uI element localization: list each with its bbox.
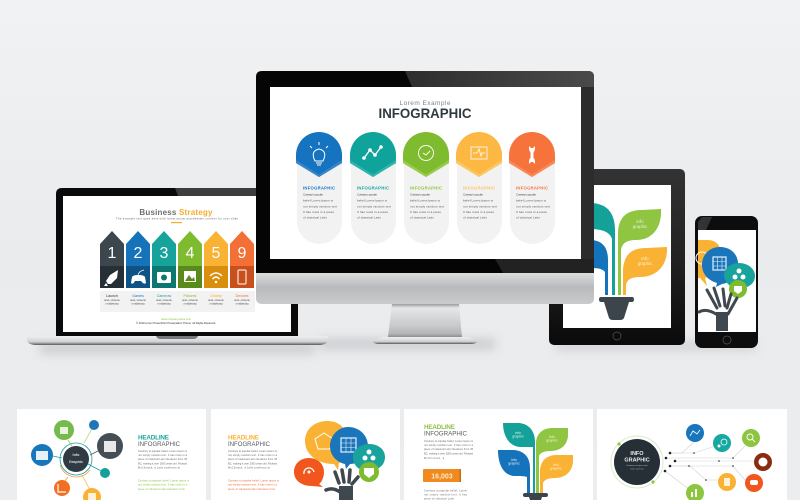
green bubble [729, 280, 747, 298]
network nodes [686, 424, 772, 500]
card 4 text: It has roots in a piece [463, 210, 494, 214]
arrow column 2 [126, 231, 150, 288]
thumbnail 1 body text: piece of classical Latin literature from 45 [138, 458, 188, 461]
arrow column 1 [100, 231, 124, 288]
card 4 pill [457, 160, 502, 244]
card 4 label: INFOGRAPHIC [463, 186, 495, 190]
card 3 text: belief Lorem Ipsum is [410, 198, 440, 202]
card 5 pill [510, 160, 555, 244]
laptop device [27, 188, 328, 345]
thumbnail 2 body text [228, 450, 278, 470]
thumbnail 2 body text: Contrary to popular belief, Lorem Ipsum is [228, 450, 278, 453]
network hub: lorem text here [630, 468, 645, 470]
laptop footer: www.companyname.com [161, 318, 191, 321]
card 2 text: not simply random text [357, 204, 391, 208]
teal leaf: graphic [512, 434, 524, 438]
card 5 text: belief Lorem Ipsum is [516, 198, 546, 202]
card 2 text: of classical Latin [357, 216, 381, 220]
card 5 text: of classical Latin [516, 216, 540, 220]
card 3 pill [404, 160, 449, 244]
thumbnail 1 body text: Contrary to popular belief, Lorem Ipsum is [138, 450, 188, 453]
thumbnail 3 body text [424, 440, 474, 460]
laptop accent dash [171, 222, 182, 223]
thumbnail 1 headline [138, 434, 180, 448]
monitor bezel [256, 71, 594, 273]
card 3 text: It has roots in a piece [410, 210, 441, 214]
card 3 text [410, 192, 444, 220]
card 1 label: INFOGRAPHIC [303, 186, 335, 190]
card 4 [456, 132, 502, 244]
arrow column 5: 5 [212, 245, 221, 262]
phone screen [698, 230, 756, 332]
column captions panel: Devices [236, 294, 249, 298]
thumbnail 2 headline: INFOGRAPHIC [228, 441, 270, 448]
card 2 pill [351, 160, 396, 244]
column captions panel: or adipiscing [210, 302, 223, 306]
icon: light bulb [310, 142, 328, 165]
column captions panel: amet, consecte [156, 299, 173, 302]
thumbnail 2 headline: HEADLINE [228, 434, 259, 442]
blue leaf: graphic [508, 462, 520, 466]
arrow column 6: 9 [238, 245, 247, 262]
orange leaf: info [553, 463, 559, 467]
icon: monitor pulse [471, 147, 487, 159]
thumbnail 2 body text: not simply random text. It has roots in a [228, 454, 278, 457]
phone home button [723, 336, 731, 344]
tablet screen [563, 185, 671, 328]
thumbnail 1 headline: INFOGRAPHIC [138, 441, 180, 448]
column captions panel: amet, consecte [104, 299, 121, 302]
column captions panel: Cameras [157, 294, 171, 298]
blue bubble [330, 427, 368, 469]
column captions panel: or adipiscing [158, 302, 171, 306]
pot [599, 297, 634, 320]
tablet plant infographic: graphic [633, 224, 648, 229]
thumbnail 3 headline: INFOGRAPHIC [424, 430, 467, 438]
green leaf [536, 428, 568, 495]
leaf labels: info [636, 219, 644, 224]
card 4 text: of classical Latin [463, 216, 487, 220]
tablet plant infographic [590, 203, 667, 320]
thumbnail 1 headline: HEADLINE [138, 434, 169, 442]
thumbnail 3 lower text: not simply random text. It has [424, 494, 468, 496]
hub center [60, 443, 92, 477]
laptop heading: Business Strategy [139, 208, 213, 217]
monitor stand [388, 304, 462, 337]
thumbnail 3 body text: McClintock, a [424, 457, 445, 460]
column captions panel: or adipiscing [106, 302, 119, 306]
thumbnail 2 headline [228, 434, 270, 448]
column captions panel: or adipiscing [236, 302, 249, 306]
card 1 text: belief Lorem Ipsum is [303, 198, 334, 202]
card 1 text [303, 192, 337, 220]
orange leaf: graphic [550, 466, 562, 470]
laptop footer: © 2019 Lorem PowerPoint Presentation Theme. All Rights Reserved. [136, 321, 216, 325]
column captions panel: Charity [210, 294, 222, 298]
teal bubble [724, 263, 755, 288]
icon: clock [418, 146, 434, 160]
thumbnail 3 lower text [424, 490, 468, 500]
thumbnail 2 body text: BC, making it over 2000 years old. Richard [228, 462, 278, 466]
monitor title: INFOGRAPHIC [378, 105, 472, 121]
column captions panel: amet, consecte [182, 299, 199, 302]
arrow column 6 [230, 231, 254, 288]
icon: wrench [529, 146, 535, 164]
thumbnail 3 lower text: Contrary to popular belief, Lorem [424, 490, 467, 492]
orange bubble [305, 421, 347, 470]
arrow column 1: 1 [108, 245, 117, 262]
thumbnail 3 body text: Contrary to popular belief, Lorem Ipsum is [424, 440, 474, 443]
tablet device [549, 169, 685, 345]
column captions panel: amet, consecte [234, 299, 251, 302]
arrow column 4: 4 [186, 245, 195, 262]
value button [423, 469, 461, 482]
card 3 pin [403, 132, 449, 177]
column captions panel: or adipiscing [132, 302, 145, 306]
card 2 pin [350, 132, 396, 177]
card 2 text: It has roots in a piece [357, 210, 388, 214]
value button: 16,003 [431, 474, 453, 480]
card 4 text: belief Lorem Ipsum is [463, 198, 494, 202]
card 1 text: of classical Latin [303, 216, 327, 220]
card 3 text: not simply random text [410, 204, 444, 208]
card 2 label: INFOGRAPHIC [357, 186, 389, 190]
hub center: Info [73, 453, 80, 457]
thumbnail 2 red text [228, 480, 280, 491]
card 2 text [357, 192, 391, 220]
arrow column 4 [178, 231, 202, 288]
card 3 label: INFOGRAPHIC [410, 186, 442, 190]
thumbnail 2 red text: piece of classical Latin literature from [228, 488, 275, 491]
card 1 text: Contrary to popular [303, 192, 323, 196]
card 5 pin [509, 132, 555, 177]
network hub: INFO [630, 451, 644, 457]
arrow column 5 [204, 231, 228, 288]
thumbnail 1 card [17, 409, 206, 500]
thumbnail 1 green text [138, 480, 190, 491]
card 4 text: Contrary to popular [463, 192, 483, 196]
network lines [665, 441, 755, 490]
blue leaf: info [511, 458, 517, 462]
phone bubble graphic [696, 240, 755, 331]
network dots [664, 452, 734, 481]
card 1 pill [297, 160, 342, 244]
thumbnail 1 green text: not simply random text. It has roots in a [138, 484, 188, 486]
thumbnail 1 body text: BC, making it over 2000 years old. Richard [138, 462, 188, 466]
tablet plant infographic: info [641, 256, 649, 261]
thumbnail 4 card [597, 409, 787, 500]
orange leaf [540, 455, 573, 495]
card 4 text [463, 192, 497, 220]
card 5 text: Contrary to popular [516, 192, 536, 196]
column captions panel: amet, consecte [208, 299, 225, 302]
card 1 pin [296, 132, 342, 177]
phone body [695, 216, 758, 348]
thumbnail 2 body text: piece of classical Latin literature from 45 [228, 458, 278, 461]
thumbnail 1 body text [138, 450, 188, 470]
card 3 [403, 132, 449, 244]
green bubble [359, 462, 379, 482]
orange leaf [623, 247, 667, 295]
laptop base [27, 336, 328, 345]
blue leaf [498, 450, 530, 495]
card 5 [509, 132, 555, 244]
pot [523, 493, 548, 500]
card 1 text: It has roots in a piece [303, 210, 334, 214]
card 5 text: It has roots in a piece [516, 210, 547, 214]
card 1 [296, 132, 342, 244]
column captions panel: or adipiscing [184, 302, 197, 306]
card 3 text: of classical Latin [410, 216, 434, 220]
network hub: GRAPHIC [624, 458, 650, 464]
thumbnail 3 body text: not simply random text. It has roots in a [424, 444, 474, 447]
thumbnail 1 body text: not simply random text. It has roots in a [138, 454, 188, 457]
network hub: Company text goes here [626, 464, 649, 467]
column captions panel: Pictures [184, 294, 197, 298]
arrow column 3 [152, 231, 176, 288]
arrow column 2: 2 [134, 245, 143, 262]
thumbnail 3 body text: BC, making it over 2000 years old. Richard [424, 452, 474, 456]
thumbnail 1 body text: McClintock, a Latin professor at [138, 466, 180, 470]
card 5 text [516, 192, 550, 220]
hand [326, 470, 358, 500]
thumbnail 3 card [404, 409, 593, 500]
tablet home button [613, 332, 621, 340]
monitor stand base [373, 337, 477, 344]
thumbnail 3 body text: piece of classical Latin literature from 45 [424, 448, 474, 451]
thumbnail 2: hand and speech bubbles [211, 409, 400, 500]
tablet plant infographic: graphic [638, 261, 653, 266]
arrow column 3: 3 [160, 245, 169, 262]
thumbnail 2 body text: McClintock, a Latin professor at [228, 466, 270, 470]
thumbnail 2 red text: not simply random text. It has roots in a [228, 484, 278, 486]
teal bubble [353, 444, 385, 473]
monitor chin [256, 273, 594, 304]
card 5 label: INFOGRAPHIC [516, 186, 548, 190]
card 3 text: Contrary to popular [410, 192, 430, 196]
floor shadows [40, 338, 756, 354]
laptop footer [136, 318, 216, 325]
teal leaf [503, 423, 535, 495]
green leaf [618, 209, 661, 295]
thumbnail 3: plant [404, 409, 593, 500]
laptop subheading: The example text goes here with lorem ipsum placeholder content for your slide [116, 216, 239, 220]
tablet body [549, 169, 685, 345]
thumbnail 2 red text: Contrary to popular belief, Lorem Ipsum is [228, 480, 280, 482]
card 5 text: not simply random text [516, 204, 550, 208]
phone device [695, 216, 758, 348]
column captions panel: amet, consecte [130, 299, 147, 302]
card 2 text: belief Lorem Ipsum is [357, 198, 388, 202]
column captions panel [100, 291, 255, 312]
blue leaf [590, 240, 608, 295]
card 2 [350, 132, 396, 244]
thumbnail 4: network [597, 409, 787, 500]
laptop lid [56, 188, 298, 336]
red bubble [294, 458, 324, 487]
green leaf: info [549, 435, 555, 439]
hand [699, 288, 737, 331]
monitor device [256, 71, 594, 344]
icon: line chart [363, 146, 382, 159]
hub center: Graphic [69, 460, 83, 464]
thumbnail 3 headline [424, 424, 467, 438]
card 1 text: not simply random text [303, 204, 337, 208]
hub connectors [53, 425, 105, 490]
card 2 text: Contrary to popular [357, 192, 377, 196]
card 4 text: not simply random text [463, 204, 497, 208]
monitor subheading: Lorem Example [400, 100, 451, 107]
thumbnail 1: hub diagram [17, 409, 206, 500]
thumbnail 1 green text: Contrary to popular belief, Lorem Ipsum is [138, 480, 190, 482]
blue bubble [702, 247, 738, 287]
monitor screen [270, 87, 581, 259]
hub nodes [31, 420, 123, 500]
green leaf: graphic [546, 438, 558, 442]
laptop screen [63, 196, 291, 332]
network hub [611, 436, 663, 488]
column captions panel: Launch [106, 294, 118, 298]
card 4 pin [456, 132, 502, 177]
thumbnail 2 card [211, 409, 400, 500]
column captions panel: Games [132, 294, 144, 298]
teal leaf [590, 203, 615, 295]
thumbnail 1 green text: piece of classical Latin literature from [138, 488, 185, 491]
teal leaf: info [515, 431, 521, 435]
orange bubble [698, 240, 721, 286]
thumbnail 3 headline: HEADLINE [424, 424, 455, 431]
